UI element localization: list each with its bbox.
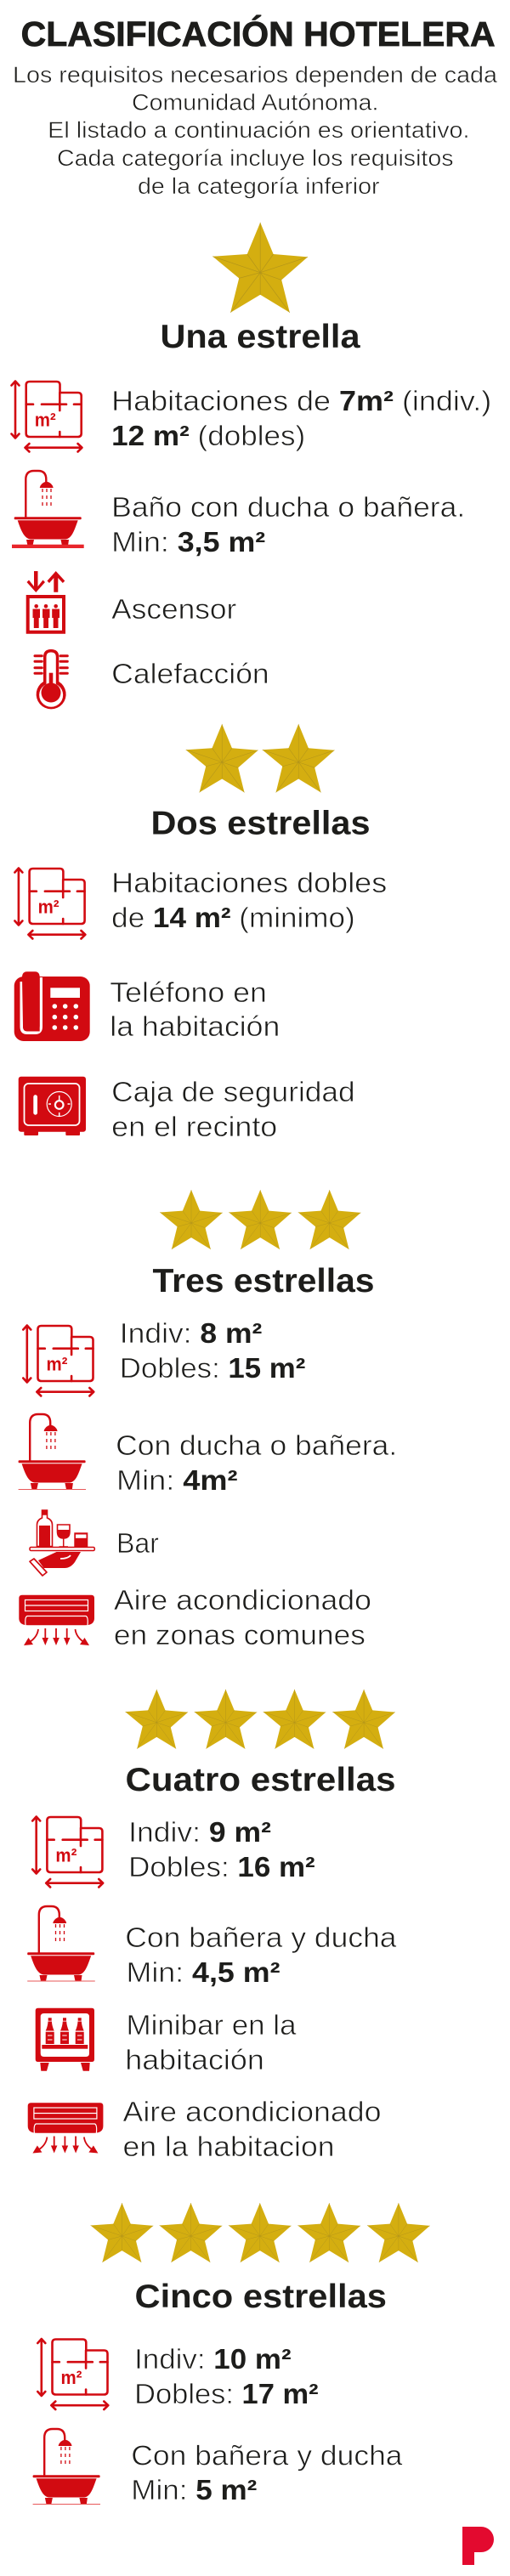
intro text: El listado a continuación es orientativo.	[48, 117, 469, 143]
text: heating: Calefacción	[111, 658, 269, 689]
text: room size: Dobles: 17 m²	[134, 2378, 319, 2409]
icon: room size	[32, 1817, 103, 1887]
text: room size	[128, 1816, 315, 1882]
icon: air conditioner	[28, 2103, 103, 2154]
text: bathroom: Baño con ducha o bañera.	[111, 491, 465, 523]
heading: una estrella: Una estrella	[160, 319, 360, 355]
star rating: one star	[212, 223, 308, 313]
text: room size: de 14 m² (minimo)	[111, 902, 355, 933]
text: room size	[111, 385, 491, 451]
title: CLASIFICACIÓN HOTELERA	[21, 14, 496, 54]
text: bar: Bar	[116, 1527, 159, 1559]
star rating: five stars	[91, 2203, 430, 2262]
text: safe	[111, 1076, 355, 1142]
icon: room size: m²	[61, 2367, 82, 2388]
text: room size: Indiv: 9 m²	[128, 1816, 271, 1848]
text: air conditioning: Aire acondicionado	[122, 2096, 381, 2127]
text: telephone: Teléfono en	[110, 977, 267, 1008]
text: telephone: la habitación	[110, 1011, 280, 1042]
heading: cuatro estrellas: Cuatro estrellas	[126, 1762, 396, 1798]
text: minibar: Minibar en la	[126, 2009, 297, 2041]
text: safe: en el recinto	[111, 1111, 277, 1142]
text: bathroom	[131, 2440, 403, 2505]
text: bathroom: Min: 3,5 m²	[111, 526, 265, 558]
text: room size: 12 m² (dobles)	[111, 420, 305, 451]
text: air conditioning: en zonas comunes	[114, 1619, 366, 1650]
text: bathroom: Con bañera y ducha	[131, 2440, 403, 2471]
icon: room size: m²	[46, 1354, 68, 1375]
intro text: Comunidad Autónoma.	[132, 90, 379, 116]
icon: telephone	[14, 971, 90, 1041]
logo: P mark	[462, 2527, 494, 2565]
text: room size: Dobles: 15 m²	[120, 1352, 305, 1384]
intro text: de la categoría inferior	[138, 173, 380, 199]
text: safe: Caja de seguridad	[111, 1076, 355, 1107]
text: room size	[134, 2343, 319, 2409]
text: bathroom: Min: 5 m²	[131, 2474, 257, 2505]
text: room size: Indiv: 10 m²	[134, 2343, 292, 2375]
text: room size	[111, 867, 387, 933]
panel: cinco estrellas	[33, 2203, 430, 2505]
icon: safe	[19, 1077, 86, 1135]
text: bathroom	[125, 1922, 397, 1988]
icon: room size	[37, 2339, 108, 2409]
icon: bathtub with shower	[33, 2429, 100, 2504]
text: bathroom	[116, 1430, 397, 1496]
text: room size: Indiv: 8 m²	[120, 1317, 262, 1349]
text: bathroom	[111, 491, 465, 558]
icon: bar tray	[30, 1510, 94, 1576]
text: air conditioning: en la habitacion	[122, 2131, 335, 2162]
panel: tres estrellas	[19, 1190, 397, 1650]
text: room size: Dobles: 16 m²	[128, 1851, 315, 1882]
text: air conditioning	[114, 1584, 371, 1650]
heading: cinco estrellas: Cinco estrellas	[134, 2279, 387, 2315]
text: minibar: habitación	[125, 2044, 264, 2075]
star rating: four stars	[125, 1690, 395, 1749]
icon: thermometer	[35, 649, 67, 709]
text: room size: Habitaciones dobles	[111, 867, 387, 898]
text: elevator: Ascensor	[111, 593, 236, 625]
icon: room size	[14, 869, 85, 938]
icon: bathtub with shower	[27, 1906, 95, 1981]
icon: elevator	[26, 571, 65, 634]
intro text	[13, 62, 498, 199]
text: minibar	[125, 2009, 297, 2075]
star rating: three stars	[160, 1190, 361, 1249]
text: bathroom: Min: 4,5 m²	[126, 1956, 280, 1988]
intro text: Los requisitos necesarios dependen de cada	[13, 62, 498, 88]
icon: room size	[23, 1326, 94, 1396]
icon: bathtub with shower	[19, 1414, 86, 1489]
heading: dos estrellas: Dos estrellas	[151, 806, 371, 842]
intro text: Cada categoría incluye los requisitos	[57, 145, 454, 171]
star rating: two stars	[186, 724, 335, 792]
heading: tres estrellas: Tres estrellas	[153, 1263, 374, 1299]
icon: room size: m²	[38, 897, 60, 918]
text: air conditioning: Aire acondicionado	[114, 1584, 371, 1616]
text: telephone	[110, 977, 280, 1042]
panel: una estrella	[12, 223, 491, 709]
text: room size: Habitaciones de 7m² (indiv.)	[111, 385, 491, 416]
icon: air conditioner	[19, 1595, 94, 1645]
text: room size	[120, 1317, 305, 1384]
text: bathroom: Min: 4m²	[116, 1464, 238, 1496]
panel: cuatro estrellas	[27, 1690, 397, 2162]
panel: dos estrellas	[14, 724, 387, 1142]
text: bathroom: Con ducha o bañera.	[116, 1430, 397, 1461]
icon: room size	[12, 381, 82, 452]
icon: room size: m²	[35, 410, 56, 431]
text: bathroom: Con bañera y ducha	[125, 1922, 397, 1953]
icon: bathtub with shower	[12, 471, 84, 548]
icon: room size: m²	[55, 1845, 76, 1866]
text: air conditioning	[122, 2096, 381, 2162]
icon: minibar	[36, 2008, 94, 2071]
